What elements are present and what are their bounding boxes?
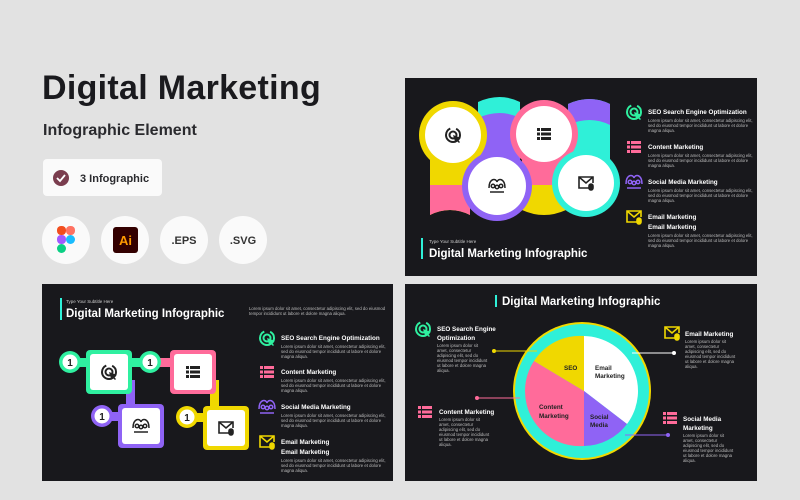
callouts: Lorem ipsum dolor sit xyxy=(439,417,481,422)
list: Email Marketing xyxy=(648,224,696,231)
callouts xyxy=(416,322,736,463)
step 3 purple: 1 xyxy=(99,412,105,423)
icon circle: email xyxy=(552,149,620,217)
title: Digital Marketing xyxy=(42,69,321,107)
list: sed do eiusmod tempor incididunt ut labore et dolore xyxy=(281,383,382,388)
panel: steps infographic: tempor incididunt ut labore et dolore magna aliqua. xyxy=(249,311,346,316)
callouts: eiusmod tempor incididunt xyxy=(439,432,490,437)
step 3 purple xyxy=(91,404,164,448)
callouts: amet, consectetur xyxy=(683,438,718,443)
callouts: Optimization xyxy=(437,335,475,342)
heading: Type Your Subtitle Here xyxy=(66,299,114,304)
callouts: eiusmod tempor incididunt xyxy=(437,358,488,363)
callouts: amet, consectetur xyxy=(685,344,720,349)
callouts: Marketing xyxy=(683,425,713,432)
callouts: Lorem ipsum dolor sit xyxy=(437,343,479,348)
pie chart: Media xyxy=(590,422,608,429)
panel: pie infographic xyxy=(405,284,757,481)
list: Lorem ipsum dolor sit amet, consectetur adipiscing elit, xyxy=(648,188,753,193)
icon: illustrator: Ai xyxy=(119,233,132,248)
list: Content Marketing xyxy=(281,369,336,376)
list: Lorem ipsum dolor sit amet, consectetur adipiscing elit, xyxy=(648,118,753,123)
list: sed do eiusmod tempor incididunt ut labore et dolore xyxy=(281,418,382,423)
panel: steps infographic xyxy=(42,284,393,481)
pie chart: Email xyxy=(595,365,612,372)
wavy bands xyxy=(430,97,610,215)
callouts: ut labore et dolore magna xyxy=(437,363,487,368)
list: sed do eiusmod tempor incididunt ut labore et dolore xyxy=(648,238,749,243)
icon: svg xyxy=(219,216,267,264)
step 4 yellow xyxy=(176,406,249,450)
step 1 green xyxy=(59,350,132,394)
step 2 pink: 1 xyxy=(147,358,153,369)
heading: Digital Marketing Infographic xyxy=(66,308,225,320)
list: sed do eiusmod tempor incididunt ut labore et dolore xyxy=(648,123,749,128)
callouts: aliqua. xyxy=(439,442,452,447)
pie chart xyxy=(513,322,651,460)
icon: svg: .SVG xyxy=(230,235,256,247)
callouts: Lorem ipsum dolor sit xyxy=(685,339,727,344)
list: sed do eiusmod tempor incididunt ut labore et dolore xyxy=(648,193,749,198)
callouts: Content Marketing xyxy=(439,409,494,416)
callouts: aliqua. xyxy=(437,368,450,373)
callouts: adipiscing elit, sed do xyxy=(683,443,725,448)
callouts: aliqua. xyxy=(683,458,696,463)
pie chart: Social xyxy=(590,414,609,421)
badge: 3 infographic xyxy=(43,159,162,196)
panel: steps infographic: Lorem ipsum dolor sit amet, consectetur adipiscing elit, sed do eiusmod xyxy=(249,306,386,311)
list: magna aliqua. xyxy=(648,198,675,203)
callouts: Social Media xyxy=(683,416,722,423)
list: sed do eiusmod tempor incididunt ut labore et dolore xyxy=(281,463,382,468)
list: sed do eiusmod tempor incididunt ut labore et dolore xyxy=(281,349,382,354)
list: Email Marketing xyxy=(648,214,696,221)
step 1 green: 1 xyxy=(67,358,73,369)
icon: figma xyxy=(42,216,90,264)
list: magna aliqua. xyxy=(281,388,308,393)
list xyxy=(259,331,386,473)
list: SEO Search Engine Optimization xyxy=(281,335,380,342)
icon circle: seo xyxy=(419,101,487,169)
icon circle: content xyxy=(510,100,578,168)
pie chart: Content xyxy=(539,404,564,411)
list: Lorem ipsum dolor sit amet, consectetur adipiscing elit, xyxy=(648,233,753,238)
list: magna aliqua. xyxy=(281,468,308,473)
step 2 pink xyxy=(139,350,216,394)
connectors xyxy=(475,349,676,437)
list: magna aliqua. xyxy=(648,128,675,133)
badge: 3 infographic: 3 Infographic xyxy=(80,173,149,185)
callouts: ut labore et dolore magna xyxy=(683,453,733,458)
icon circle: social xyxy=(462,151,532,221)
callouts: adipiscing elit, sed do xyxy=(685,349,727,354)
list: SEO Search Engine Optimization xyxy=(648,109,747,116)
callouts: adipiscing elit, sed do xyxy=(439,427,481,432)
list xyxy=(626,105,753,248)
connectors xyxy=(126,358,176,367)
pie chart: SEO xyxy=(564,365,577,372)
list: Lorem ipsum dolor sit amet, consectetur adipiscing elit, xyxy=(281,458,386,463)
icon: eps xyxy=(160,216,208,264)
list: Social Media Marketing xyxy=(281,404,351,411)
heading xyxy=(60,298,225,320)
icon: eps: .EPS xyxy=(171,235,197,247)
heading xyxy=(421,238,588,260)
callouts: eiusmod tempor incididunt xyxy=(683,448,734,453)
pie chart: Marketing xyxy=(595,373,625,380)
callouts: amet, consectetur xyxy=(437,348,472,353)
list: magna aliqua. xyxy=(281,423,308,428)
callouts: amet, consectetur xyxy=(439,422,474,427)
step 4 yellow: 1 xyxy=(184,413,190,424)
list: Lorem ipsum dolor sit amet, consectetur adipiscing elit, xyxy=(281,344,386,349)
callouts: ut labore et dolore magna xyxy=(685,359,735,364)
panel: circles infographic xyxy=(405,78,757,276)
icon: illustrator xyxy=(101,216,149,264)
callouts: aliqua. xyxy=(685,364,698,369)
list: Content Marketing xyxy=(648,144,703,151)
pie chart: Marketing xyxy=(539,413,569,420)
list: Social Media Marketing xyxy=(648,179,718,186)
list: magna aliqua. xyxy=(648,163,675,168)
callouts: Email Marketing xyxy=(685,331,733,338)
list: magna aliqua. xyxy=(648,243,675,248)
callouts: ut labore et dolore magna xyxy=(439,437,489,442)
callouts: eiusmod tempor incididunt xyxy=(685,354,736,359)
list: Email Marketing xyxy=(281,449,329,456)
list: sed do eiusmod tempor incididunt ut labore et dolore xyxy=(648,158,749,163)
callouts: adipiscing elit, sed do xyxy=(437,353,479,358)
list: Lorem ipsum dolor sit amet, consectetur adipiscing elit, xyxy=(648,153,753,158)
list: magna aliqua. xyxy=(281,354,308,359)
list: Email Marketing xyxy=(281,439,329,446)
heading: Type Your Subtitle Here xyxy=(429,239,477,244)
callouts: Lorem ipsum dolor sit xyxy=(683,433,725,438)
heading: Digital Marketing Infographic xyxy=(502,296,661,308)
list: Lorem ipsum dolor sit amet, consectetur adipiscing elit, xyxy=(281,413,386,418)
list: Lorem ipsum dolor sit amet, consectetur adipiscing elit, xyxy=(281,378,386,383)
callouts: SEO Search Engine xyxy=(437,326,496,333)
subtitle: Infographic Element xyxy=(43,122,197,139)
heading: Digital Marketing Infographic xyxy=(429,248,588,260)
